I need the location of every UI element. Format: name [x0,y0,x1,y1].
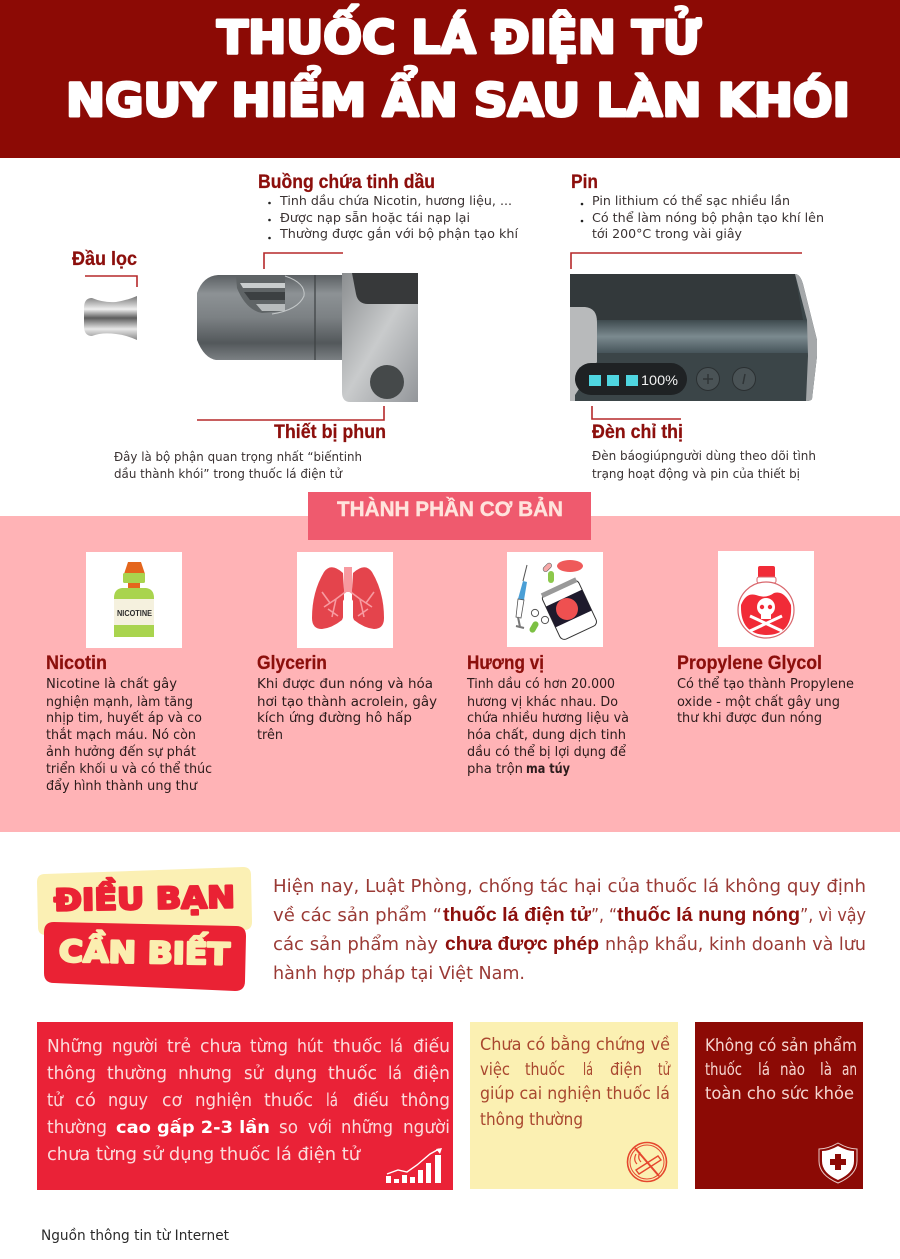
label: indicator light [592,406,816,481]
text block: legal notice: Hiện nay, Luật Phòng, chống tác hại của thuốc lá không quy định [273,876,866,897]
panel: addiction risk: sử [244,1064,264,1084]
panel: addiction risk: lá [390,1037,403,1057]
icon: nicotine bottle: NICOTINE [117,608,152,618]
icon: fire button [370,365,404,399]
panel: addiction risk: có [75,1091,96,1111]
column: Huong vi: chứa nhiều hương liệu và [467,711,629,726]
panel: no safe product: an [842,1060,857,1079]
panel: no evidence of quitting aid [470,1022,678,1189]
panel: addiction risk: trẻ [167,1037,191,1057]
column: Glycerin: trên [257,728,283,743]
indicator display [575,363,687,395]
text block: legal notice: thuốc lá điện tử [443,905,591,926]
heading pill: THÀNH PHẦN CƠ BẢN [337,498,563,521]
column: Huong vi: hương vị khác nhau. Do [467,695,618,710]
column: Huong vi: dầu có thể bị lợi dụng để [467,745,626,760]
text block: legal notice: nhập khẩu, kinh doanh và lưu [605,934,866,955]
icon: no smoking [628,1142,666,1182]
column: Huong vi: Tinh dầu có hơn 20.000 [466,677,615,692]
label: indicator light: Đèn chỉ thị [592,422,683,443]
label: atomizer: dầu thành khói” trong thuốc lá điện tử [114,466,343,481]
panel: addiction risk: thường [47,1118,107,1138]
column: Propylene Glycol: Propylene Glycol [677,653,822,674]
panel: no evidence of quitting aid: tử [658,1060,671,1079]
panel: addiction risk: chưa [200,1037,242,1057]
button: minus [732,368,756,390]
column: Propylene Glycol: thư khi được đun nóng [677,711,822,726]
panel: addiction risk: thuốc [328,1063,377,1084]
panel: addiction risk: chưa từng sử dụng thuốc lá điện tử [47,1144,361,1165]
column: Huong vi: pha trộn [467,762,523,777]
icon: nicotine bottle [86,552,182,648]
column: Glycerin: Glycerin [257,653,327,674]
column: Nicotin: thắt mạch máu. Nó còn [46,728,196,743]
label: tank [258,172,519,269]
text block: legal notice: ”, vì vậy [800,905,866,926]
panel: addiction risk: lá [326,1091,338,1111]
column: Nicotin: ảnh hưởng đến sự phát [46,745,196,760]
label: battery: Pin lithium có thể sạc nhiều lần [592,193,790,208]
column: Propylene Glycol: Có thể tạo thành Propylene [677,677,854,692]
panel: addiction risk: so [279,1118,298,1138]
column: Glycerin: Khi được đun nóng và hóa [257,677,433,692]
panel: addiction risk: thông [47,1064,96,1084]
column: Nicotin: nhịp tim, huyết áp và co [46,711,202,726]
panel: no safe product [695,1022,863,1189]
label: indicator light: Đèn báogiúpngười dùng theo dõi tình [592,448,816,463]
icon: rising chart [386,1148,442,1183]
label: indicator light: trạng hoạt động và pin của thiết bị [592,466,800,481]
panel: addiction risk: điện [413,1064,450,1084]
title: THUỐC LÁ ĐIỆN TỬ [217,6,701,64]
panel: addiction risk: dụng [274,1064,317,1084]
panel: addiction risk: tử [47,1091,64,1111]
panel: addiction risk: Những [47,1037,103,1057]
label: tank: Được nạp sẵn hoặc tái nạp lại [280,210,470,225]
column: Glycerin: kích ứng đường hô hấp [257,711,412,726]
column: Nicotin: Nicotin [46,653,107,674]
text block: legal notice [273,876,866,984]
column: Propylene Glycol: oxide - một chất gây ung [677,695,840,710]
indicator display: 100% [641,372,678,388]
label: battery: Pin [571,172,598,193]
button: plus [696,368,720,390]
column: Glycerin [257,653,437,743]
panel: addiction risk: thông [401,1091,450,1111]
device: right part with battery [570,274,817,401]
panel: addiction risk: thuốc [333,1036,382,1057]
label: atomizer: Thiết bị phun [274,422,386,443]
badge: things you need to know: ĐIỀU BẠN [54,875,235,919]
panel: addiction risk: cao gấp 2-3 lần [116,1118,270,1137]
source note: Nguồn thông tin từ Internet [41,1227,229,1244]
icon: lungs [297,552,393,648]
panel: addiction risk: cơ [162,1091,182,1111]
column: Nicotin [46,653,212,794]
title [66,6,850,127]
text block: legal notice: thuốc lá nung nóng [617,905,800,926]
panel: addiction risk: nguy [108,1091,148,1111]
text block: legal notice: chưa được phép [445,934,599,955]
panel: addiction risk: những [341,1118,393,1138]
panel: addiction risk: thuốc [264,1090,313,1111]
column: Huong vi: Hương vị [467,653,544,674]
text block: legal notice: hành hợp pháp tại Việt Nam. [273,963,525,984]
label: battery: tới 200°C trong vài giây [592,226,743,241]
panel: no safe product: thuốc [705,1060,742,1079]
column: Huong vi: ma túy [526,762,570,777]
text block: legal notice: ”, “ [591,905,617,926]
panel: no safe product: toàn cho sức khỏe [705,1084,854,1103]
column: Propylene Glycol [677,653,854,726]
panel: no evidence of quitting aid: Chưa có bằng chứng về [480,1035,670,1054]
text block: legal notice: về các sản phẩm “ [273,905,442,926]
label: atomizer [114,406,386,481]
label: battery: Có thể làm nóng bộ phận tạo khí lên [592,210,824,225]
panel: no safe product: lá [758,1060,770,1079]
panel: no safe product: Không có sản phẩm [705,1036,857,1055]
panel: addiction risk: người [112,1037,158,1057]
badge: things you need to know: CẦN BIẾT [59,930,231,972]
panel: basic ingredients [0,492,900,832]
icon: health shield [819,1143,857,1183]
panel: addiction risk: hút [297,1037,323,1057]
panel: addiction risk: từng [250,1037,288,1057]
panel: addiction risk: lá [388,1064,402,1084]
panel: addiction risk: người [403,1118,450,1138]
label: atomizer: Đây là bộ phận quan trọng nhất “biếntinh [114,449,362,464]
label: tank: Tinh dầu chứa Nicotin, hương liệu, ... [279,193,512,208]
icon: mouthpiece [84,296,137,340]
panel: addiction risk: với [308,1118,332,1138]
label: tank: Buồng chứa tinh dầu [258,172,435,193]
text block: legal notice: các sản phẩm này [273,934,438,955]
panel: no safe product: nào [780,1060,805,1079]
panel: no evidence of quitting aid: điện [610,1060,642,1079]
panel: addiction risk: nghiện [195,1091,252,1111]
panel: no evidence of quitting aid: việc [480,1060,510,1079]
device: left part with atomizer [197,273,418,402]
panel: no safe product: là [820,1060,832,1079]
column: Nicotin: nghiện mạnh, làm tăng [46,695,193,710]
label: battery [571,172,824,269]
icon: drugs and syringe [507,552,603,647]
column: Nicotin: triển khối u và có thể thúc [46,762,212,777]
label: tank: Thường được gắn với bộ phận tạo khí [279,226,519,241]
heading pill [308,492,591,540]
label: mouthpiece: Đầu lọc [72,249,137,270]
panel: addiction risk [37,1022,453,1190]
panel: no evidence of quitting aid: thuốc [525,1060,565,1079]
label: mouthpiece [72,249,137,340]
panel: addiction risk: thường [107,1064,167,1084]
badge: things you need to know [37,867,252,991]
icon: poison flask [718,551,814,647]
column: Nicotin: Nicotine là chất gây [46,677,177,692]
column: Nicotin: đẩy hình thành ung thư [46,779,198,794]
panel: addiction risk: điếu [413,1036,450,1057]
panel: no evidence of quitting aid: lá [583,1060,593,1079]
column: Huong vi: hóa chất, dung dịch tinh [467,728,626,743]
column: Glycerin: hơi tạo thành acrolein, gây [257,695,437,710]
panel: no evidence of quitting aid: thông thường [480,1110,583,1129]
column: Huong vi [466,653,629,777]
panel: addiction risk: nhưng [178,1064,232,1084]
title: NGUY HIỂM ẨN SAU LÀN KHÓI [66,67,850,127]
header band [0,0,900,158]
panel: no evidence of quitting aid: giúp cai nghiện thuốc lá [480,1084,670,1103]
panel: addiction risk: điếu [353,1090,389,1111]
